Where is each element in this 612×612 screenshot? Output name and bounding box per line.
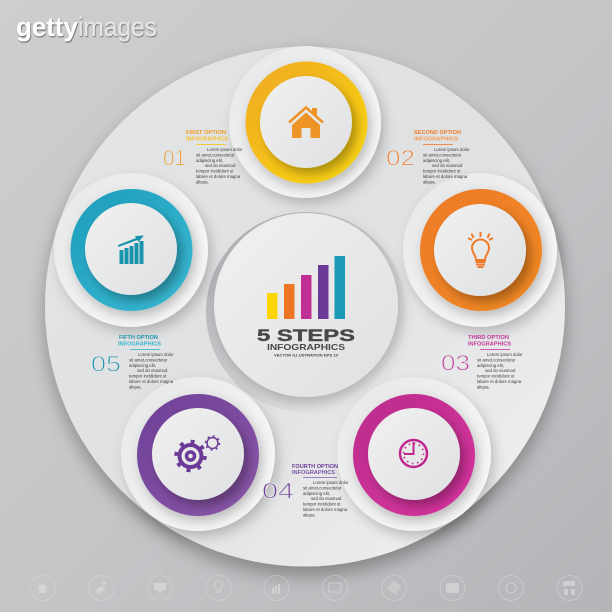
text block: first option: FIRST OPTION — [186, 130, 226, 136]
text block: fourth option: aliqua. — [303, 512, 316, 517]
bottom icon row — [30, 576, 582, 600]
text block: fifth option: 05 — [91, 352, 121, 376]
text block: first option: sit amet,consectetur — [196, 152, 235, 157]
text block: third option: THIRD OPTION — [468, 335, 509, 341]
text block: third option: aliqua. — [477, 384, 490, 389]
step 2: orange circle with bulb icon — [403, 173, 557, 327]
text block: second option: INFOGRAPHICS — [414, 136, 459, 142]
icon: house — [289, 108, 323, 138]
text block: fifth option: adipiscing elit, — [129, 363, 156, 368]
text block: first option: 01 — [163, 146, 186, 170]
text block: second option: tempor incididunt ut — [423, 169, 461, 174]
icon: gears — [176, 436, 220, 470]
text block: fourth option: sit amet,consectetur — [303, 485, 342, 490]
text block: third option: Lorem ipsum dolor — [487, 352, 523, 357]
step 3: magenta circle with clock icon — [337, 377, 491, 531]
text block: fourth option — [262, 464, 349, 517]
center caption: VECTOR ILLUSTRATION EPS 10 — [274, 354, 338, 358]
text block: fourth option: FOURTH OPTION — [292, 464, 338, 470]
text block: first option: aliqua. — [196, 179, 209, 184]
text block: third option — [441, 335, 523, 389]
text block: first option: Lorem ipsum dolor — [207, 147, 243, 152]
text block: second option: sed do eiusmod — [432, 163, 463, 168]
text block: fifth option: sit amet,consectetur — [129, 357, 168, 362]
logo: getty images — [16, 12, 157, 42]
center ring — [206, 212, 406, 412]
text block: fifth option: labore et dolore magna — [129, 379, 174, 384]
text block: fourth option: 04 — [262, 478, 294, 504]
text block: fifth option — [91, 335, 174, 389]
text block: first option: labore et dolore magna — [196, 174, 241, 179]
text block: third option: 03 — [441, 350, 470, 376]
text block: fifth option: aliqua. — [129, 384, 142, 389]
text block: fourth option: sed do eiusmod — [311, 496, 342, 501]
step 1: yellow circle with house icon — [229, 46, 381, 198]
step 4: purple circle with gears icon — [121, 377, 275, 531]
text block: fifth option: INFOGRAPHICS — [118, 342, 162, 348]
text block: third option: sit amet,consectetur — [477, 357, 516, 362]
text block: first option: sed do eiusmod — [205, 163, 236, 168]
text block: second option: labore et dolore magna — [423, 174, 468, 179]
text block: first option: adipiscing elit, — [196, 158, 223, 163]
text block: fifth option: Lorem ipsum dolor — [138, 352, 174, 357]
text block: first option: tempor incididunt ut — [196, 169, 234, 174]
text block: first option: INFOGRAPHICS — [186, 136, 229, 142]
text block: fourth option: tempor incididunt ut — [303, 502, 341, 507]
text block: second option: 02 — [386, 146, 415, 170]
text block: fourth option: adipiscing elit, — [303, 491, 330, 496]
text block: third option: sed do eiusmod — [485, 368, 516, 373]
icon: clock — [400, 440, 427, 467]
text block: second option — [386, 130, 470, 184]
text block: fifth option: tempor incididunt ut — [129, 374, 167, 379]
center title: 5 STEPS — [257, 326, 355, 345]
main large circle — [45, 46, 565, 566]
center disc — [214, 213, 398, 397]
text block: third option: adipiscing elit, — [477, 363, 504, 368]
center hub — [206, 212, 406, 412]
text block: second option: adipiscing elit, — [423, 158, 450, 163]
text block: third option: tempor incididunt ut — [477, 374, 515, 379]
step 5: teal circle with chart icon — [54, 173, 208, 327]
text block: second option: sit amet,consectetur — [423, 152, 462, 157]
center subtitle: INFOGRAPHICS — [267, 342, 345, 352]
center bar chart — [267, 256, 345, 319]
text block: third option: labore et dolore magna — [477, 379, 522, 384]
logo: getty images: images — [78, 12, 157, 42]
text block: third option: INFOGRAPHICS — [468, 342, 512, 348]
text block: fifth option: FIFTH OPTION — [119, 335, 158, 341]
text block: first option — [163, 130, 243, 184]
text block: second option: Lorem ipsum dolor — [434, 147, 470, 152]
icon: light bulb — [468, 232, 493, 267]
text block: fourth option: INFOGRAPHICS — [292, 470, 336, 476]
text block: second option: aliqua. — [423, 179, 436, 184]
text block: fifth option: sed do eiusmod — [137, 368, 168, 373]
text block: fourth option: Lorem ipsum dolor — [313, 480, 349, 485]
icon: growth chart — [118, 236, 144, 264]
logo: getty images: getty — [16, 12, 78, 42]
text block: second option: SECOND OPTION — [414, 130, 461, 136]
text block: fourth option: labore et dolore magna — [303, 507, 348, 512]
